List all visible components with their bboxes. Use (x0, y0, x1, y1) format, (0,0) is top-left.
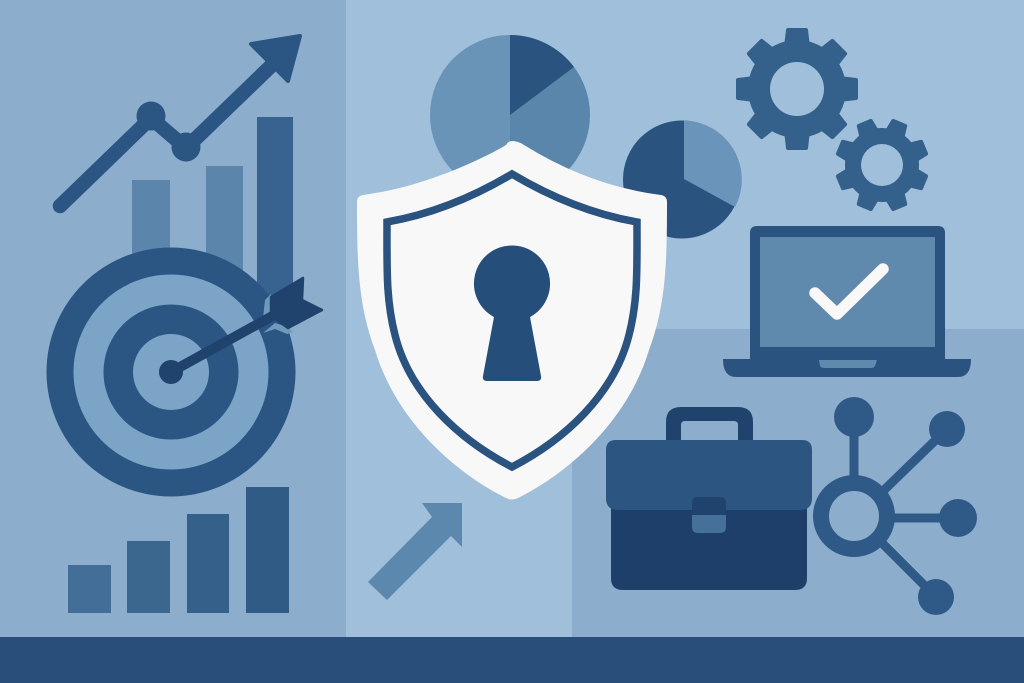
target with dart (46, 248, 322, 496)
small diagonal arrow (368, 503, 462, 600)
small pie chart (623, 120, 742, 238)
large pie chart (430, 35, 590, 195)
bottom band (0, 637, 1024, 683)
laptop with check mark (723, 226, 971, 377)
briefcase clasp (692, 497, 726, 533)
check mark (815, 269, 883, 314)
shield inner outline (387, 174, 637, 467)
trend arrow (60, 36, 300, 206)
shield (357, 141, 667, 500)
large gear (738, 30, 856, 148)
background bar chart (132, 117, 293, 297)
small gear (837, 120, 927, 210)
keyhole (474, 245, 550, 381)
briefcase (606, 407, 812, 590)
network hub diagram (821, 397, 977, 615)
rising bar chart (68, 487, 289, 613)
